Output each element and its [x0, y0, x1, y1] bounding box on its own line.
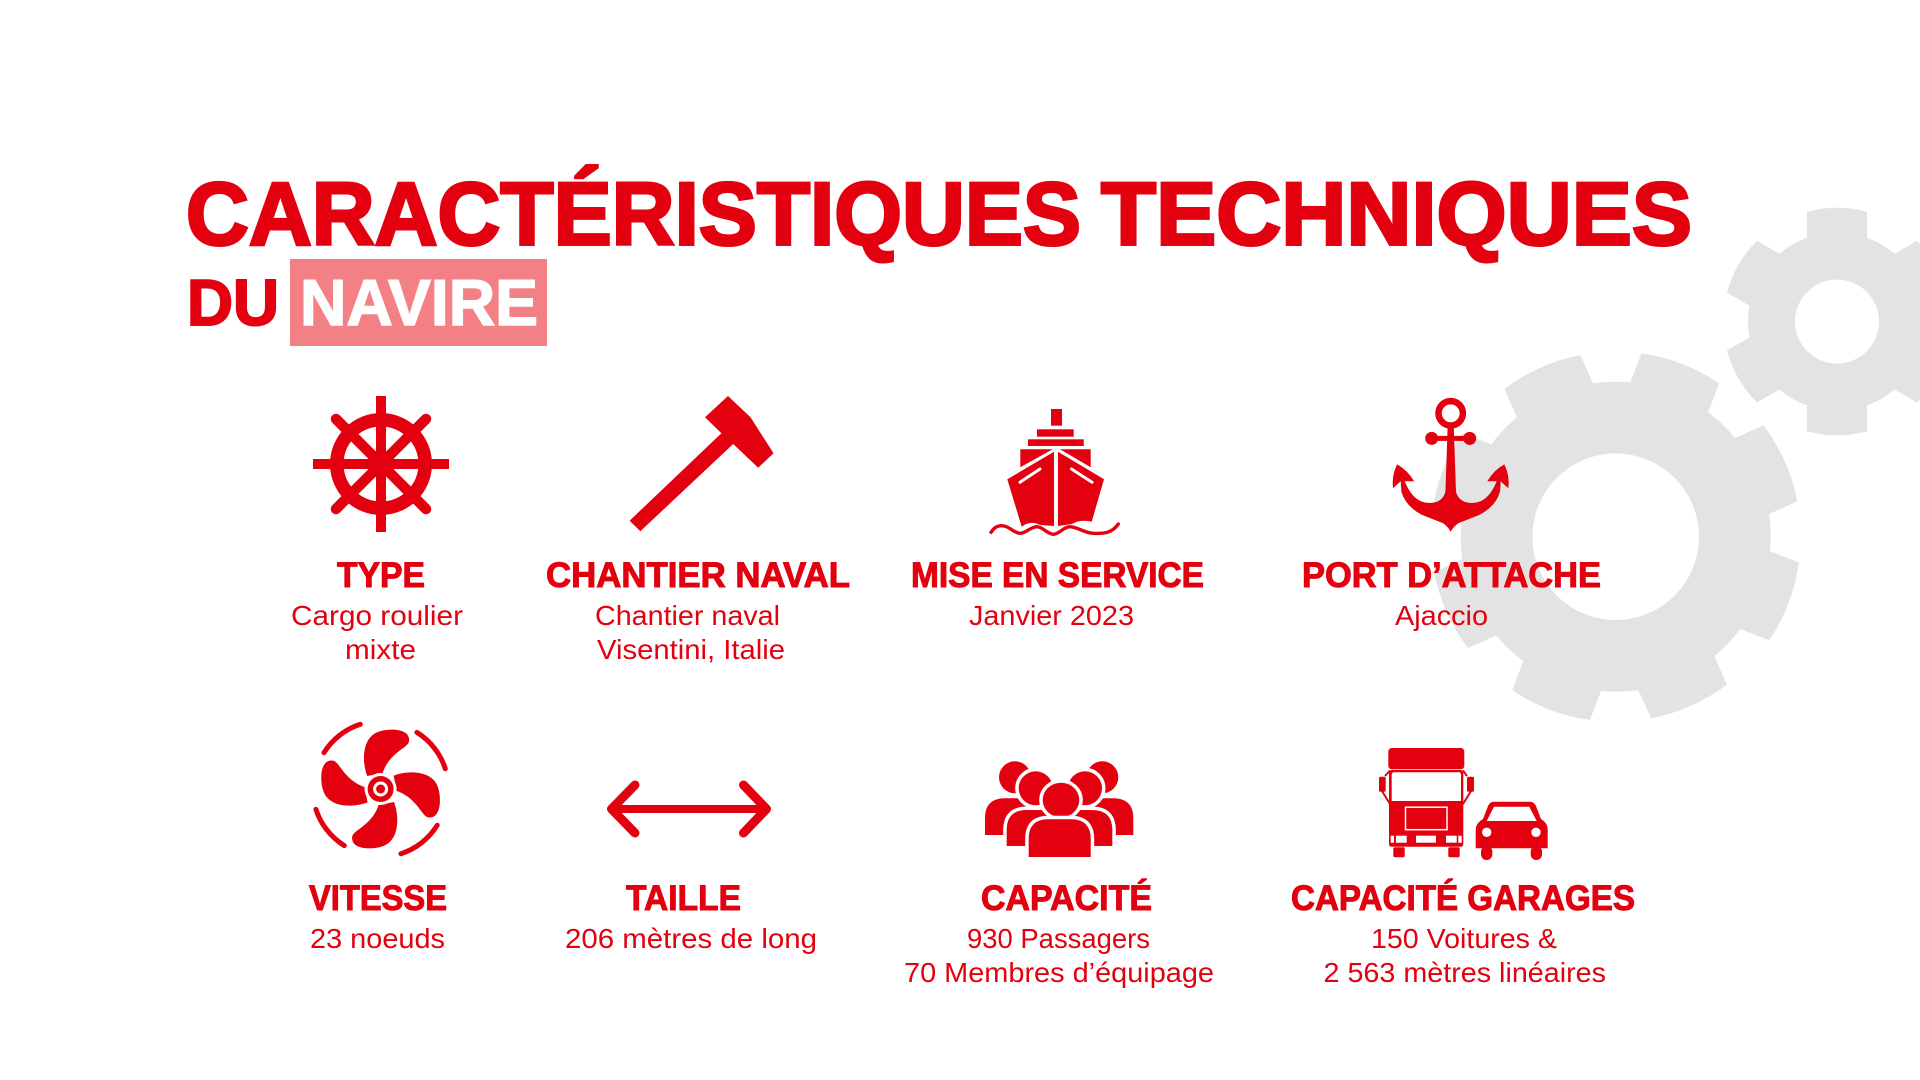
item: mise en service — [911, 409, 1204, 631]
item: chantier naval — [546, 396, 850, 665]
icon: hammer — [630, 396, 774, 531]
text: type value — [291, 600, 463, 665]
title — [186, 164, 1692, 264]
text: chantier value: Chantier naval — [595, 600, 780, 631]
icon: double arrow — [612, 785, 766, 833]
heading: capacité: CAPACITÉ — [981, 878, 1152, 918]
text: capacité value — [904, 923, 1214, 988]
text: garages value: 2 563 mètres linéaires — [1324, 957, 1606, 988]
item: capacité garages — [1291, 748, 1635, 988]
decorative gears — [1428, 208, 1920, 724]
icon: propeller — [316, 724, 445, 854]
item: type — [291, 396, 463, 665]
text: vitesse value: 23 noeuds — [310, 923, 445, 954]
text: capacité value: 930 Passagers — [967, 923, 1150, 954]
heading: vitesse: VITESSE — [309, 879, 447, 918]
subtitle — [187, 259, 547, 346]
heading: port d'attache: PORT D’ATTACHE — [1302, 556, 1601, 595]
title: TECHNIQUES — [1101, 164, 1692, 264]
item: vitesse — [309, 724, 447, 954]
icon: ship wheel — [313, 396, 449, 532]
title: CARACTÉRISTIQUES — [186, 164, 1081, 264]
text: chantier value — [595, 600, 785, 665]
text: chantier value: Visentini, Italie — [597, 634, 785, 665]
icon: anchor — [1393, 401, 1509, 532]
text: type value: mixte — [345, 634, 416, 665]
icon: people — [985, 761, 1133, 857]
text: taille value: 206 mètres de long — [565, 923, 817, 954]
heading: mise en service: MISE EN SERVICE — [911, 556, 1204, 595]
item: port d'attache — [1302, 401, 1601, 631]
icon: ship — [991, 409, 1118, 534]
text: port value: Ajaccio — [1395, 600, 1488, 631]
text: capacité value: 70 Membres d’équipage — [904, 957, 1214, 988]
text: garages value — [1324, 923, 1606, 988]
gear: large — [1428, 349, 1803, 724]
icon: truck — [1379, 748, 1474, 857]
heading: taille: TAILLE — [626, 879, 741, 918]
subtitle word: du: DU — [187, 266, 279, 339]
gear: small — [1724, 208, 1920, 435]
heading: chantier naval: CHANTIER NAVAL — [546, 556, 850, 595]
heading: capacité garages: CAPACITÉ GARAGES — [1291, 878, 1635, 918]
item: taille — [565, 785, 817, 954]
highlight box — [290, 259, 547, 346]
subtitle word: navire: NAVIRE — [300, 266, 538, 339]
heading: type: TYPE — [337, 556, 425, 595]
text: service value: Janvier 2023 — [969, 600, 1134, 631]
text: garages value: 150 Voitures & — [1371, 923, 1557, 954]
icon: car — [1476, 802, 1548, 860]
item: capacité — [904, 761, 1214, 988]
text: type value: Cargo roulier — [291, 600, 463, 631]
